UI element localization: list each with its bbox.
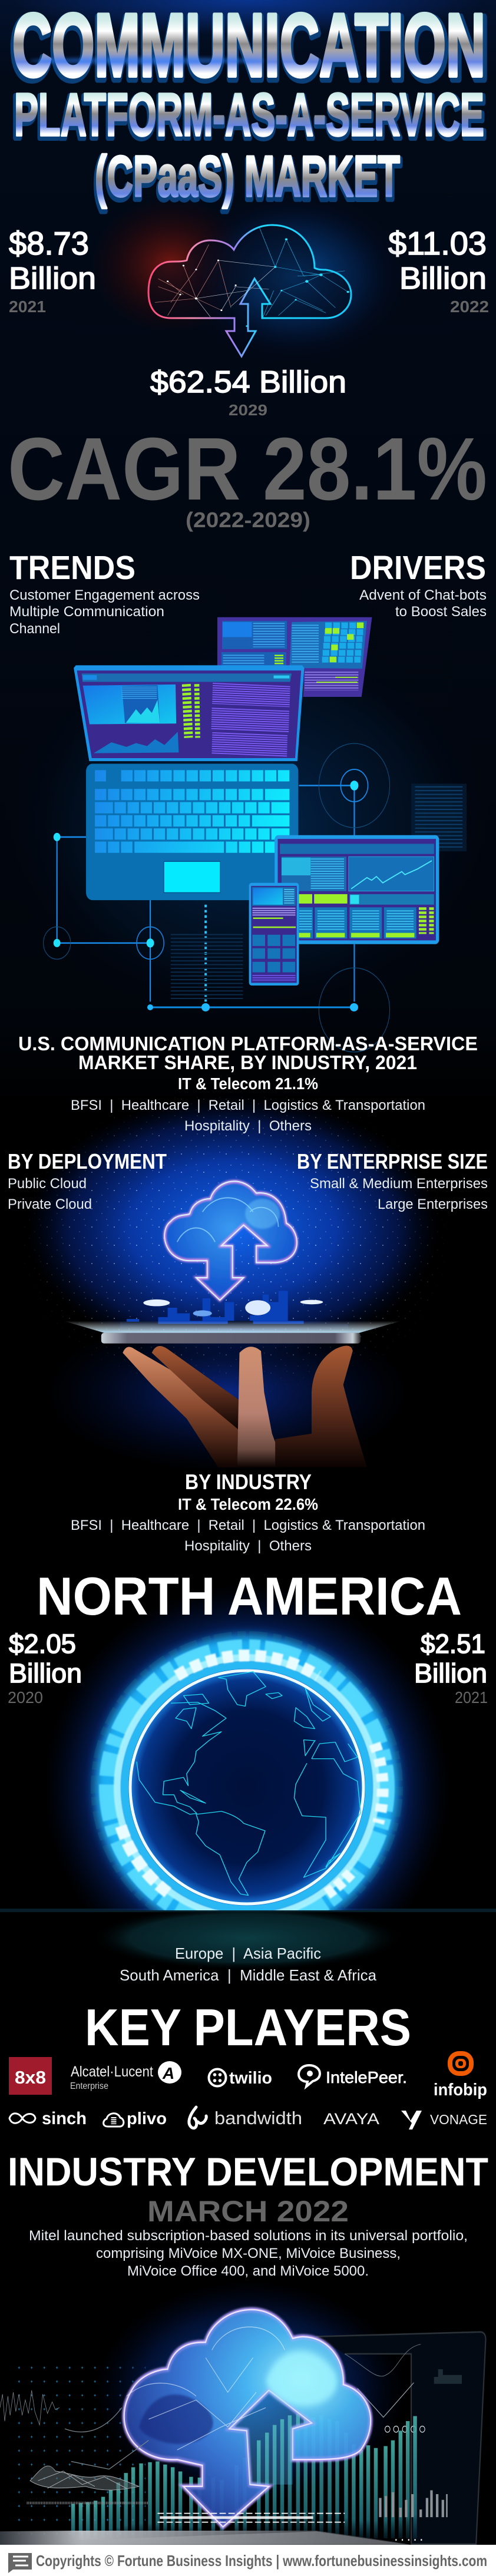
- by enterprise size: Small & Medium Enterprises: [310, 1176, 488, 1192]
- faint documents: [207, 783, 467, 1001]
- by deployment: Public Cloud: [8, 1176, 87, 1192]
- logo: Alcatel-Lucent Enterprise: A: [162, 2064, 174, 2082]
- circuit lines: [44, 743, 390, 1052]
- stat: 2021: $8.73: [9, 225, 89, 262]
- logo: 8x8: [9, 2057, 52, 2095]
- stat: 2020: $2.05: [9, 1629, 76, 1659]
- by enterprise size: [297, 1149, 488, 1212]
- ruler line: [27, 2501, 148, 2505]
- big cloud: [124, 2310, 371, 2527]
- by industry: IT & Telecom 22.6%: [178, 1495, 318, 1513]
- stat: 2029: 2029: [229, 401, 267, 419]
- glow behind laptop: [0, 624, 495, 1025]
- light beam: [63, 1321, 402, 1333]
- mesh wave: [30, 2466, 139, 2490]
- drivers: Advent of Chat-bots: [359, 587, 487, 603]
- by deployment: [8, 1149, 167, 1212]
- circuit base line: [147, 1003, 358, 1011]
- logos row 1: [9, 2051, 487, 2099]
- by industry: BFSI | Healthcare | Retail | Logistics & Transportation: [71, 1517, 425, 1533]
- curve: [65, 2408, 148, 2469]
- laptop keyboard: [86, 764, 298, 900]
- top blue glow: [12, 0, 484, 35]
- logos row 2: [9, 2107, 487, 2129]
- stat: 2020: [8, 1629, 82, 1707]
- continents: [137, 1672, 361, 1896]
- stat: 2022: [388, 225, 489, 316]
- by deployment: Private Cloud: [8, 1196, 92, 1212]
- trends: Channel: [9, 621, 60, 637]
- city skyline: [120, 1291, 348, 1328]
- stat: 2021 region: 2021: [455, 1688, 488, 1707]
- development text: MiVoice Office 400, and MiVoice 5000.: [127, 2263, 369, 2279]
- development text: comprising MiVoice MX-ONE, MiVoice Business,: [96, 2246, 401, 2261]
- stat: 2021: Billion: [9, 262, 96, 296]
- glow: [95, 2281, 405, 2504]
- stat: 2022: 2022: [450, 297, 489, 316]
- title flare: [29, 57, 265, 64]
- other regions: Europe | Asia Pacific: [175, 1945, 321, 1962]
- trends: Multiple Communication: [9, 604, 164, 620]
- illustration: devices: [44, 617, 467, 1052]
- stat: 2021: 2021: [9, 297, 46, 316]
- logo: plivo: plivo: [127, 2109, 167, 2128]
- logo: 8x8: 8x8: [15, 2067, 46, 2088]
- footer: [0, 2545, 496, 2576]
- stat: 2029: [150, 365, 346, 419]
- U.S. market share heading: [18, 1033, 478, 1134]
- logo: infobip: [434, 2051, 487, 2099]
- logo: Vonage: VONAGE: [430, 2112, 487, 2127]
- stat: 2022: $11.03: [388, 225, 487, 262]
- stat: 2020: 2020: [8, 1688, 43, 1707]
- back screen: [217, 617, 372, 697]
- region heading: NORTH AMERICA: [37, 1567, 462, 1626]
- stat: 2021: [9, 225, 96, 316]
- by industry: Hospitality | Others: [184, 1538, 312, 1554]
- phone: [249, 883, 299, 986]
- laptop surface: [0, 2531, 411, 2545]
- logo: sinch: sinch: [42, 2109, 87, 2128]
- logo: bandwidth: bandwidth: [214, 2108, 302, 2128]
- U.S. market share heading: BFSI | Healthcare | Retail | Logistics & Transportation: [71, 1097, 425, 1113]
- logo: Alcatel-Lucent Enterprise: Enterprise: [70, 2081, 108, 2091]
- dashed lines: [157, 2514, 345, 2522]
- glow and rings clipped to the floor line: [52, 1592, 442, 1910]
- stat: 2020: Billion: [9, 1658, 82, 1688]
- logo: Alcatel-Lucent Enterprise: Alcatel·Lucent: [71, 2064, 153, 2080]
- key players heading: KEY PLAYERS: [85, 1998, 411, 2056]
- CAGR: (2022-2029): [186, 508, 310, 532]
- network mesh: [155, 227, 349, 327]
- logo: IntelePeer: [299, 2065, 407, 2086]
- logo: twilio: twilio: [229, 2069, 272, 2088]
- other regions: South America | Middle East & Africa: [120, 1966, 377, 1984]
- by industry: BY INDUSTRY: [185, 1470, 312, 1494]
- hand: [123, 1345, 367, 1467]
- stat: 2021 region: $2.51: [421, 1629, 485, 1659]
- logo: plivo: [104, 2109, 167, 2128]
- waveform: [0, 2390, 59, 2425]
- other regions: [120, 1945, 377, 1984]
- icon: network cloud with up and down arrows: [91, 191, 406, 362]
- illustration: data cloud with charts: [0, 2281, 486, 2545]
- logo: Vonage: [401, 2111, 487, 2129]
- stat: 2022: Billion: [399, 262, 487, 296]
- bars: [71, 2413, 417, 2538]
- trends: TRENDS: [9, 549, 135, 587]
- drivers: to Boost Sales: [395, 604, 487, 620]
- logo: sinch: [9, 2109, 87, 2128]
- stat: 2029: $62.54 Billion: [150, 365, 346, 399]
- U.S. market share heading: IT & Telecom 21.1%: [178, 1074, 318, 1093]
- small grey bars: [379, 2490, 448, 2517]
- U.S. market share heading: U.S. COMMUNICATION PLATFORM-AS-A-SERVICE: [18, 1033, 478, 1054]
- stat: 2021 region: [414, 1629, 488, 1707]
- logo: IntelePeer: IntelePeer.: [326, 2068, 407, 2086]
- drivers: [350, 549, 487, 620]
- U.S. market share heading: Hospitality | Others: [184, 1118, 312, 1134]
- logo: infobip: infobip: [434, 2081, 487, 2099]
- tablet: [275, 835, 439, 944]
- U.S. market share heading: MARKET SHARE, BY INDUSTRY, 2021: [78, 1051, 417, 1073]
- drivers: DRIVERS: [350, 549, 486, 587]
- logo: Avaya: AVAYA: [323, 2110, 379, 2128]
- laptop outline: [316, 2332, 486, 2544]
- logo: Alcatel-Lucent Enterprise: [70, 2061, 181, 2091]
- by enterprise size: Large Enterprises: [378, 1196, 488, 1212]
- by industry: [71, 1470, 425, 1554]
- development text: [29, 2228, 468, 2279]
- phone: [101, 1333, 361, 1344]
- logo: twilio: [209, 2069, 272, 2088]
- trends: [9, 549, 200, 637]
- by deployment: BY DEPLOYMENT: [8, 1149, 167, 1173]
- cloud hologram: [164, 1181, 297, 1300]
- logo: [8, 2553, 32, 2573]
- title: [11, 0, 488, 211]
- illustration: hand holding phone with cloud hologram: [18, 1090, 448, 1473]
- stat: 2021 region: Billion: [414, 1658, 487, 1688]
- trends: Customer Engagement across: [9, 587, 200, 603]
- date: MARCH 2022: [147, 2195, 349, 2228]
- development text: Mitel launched subscription-based solutions in its universal portfolio,: [29, 2228, 468, 2244]
- illustration: glowing globe: [0, 1584, 496, 1990]
- laptop screen: [74, 665, 305, 761]
- dotted grid: [12, 2365, 146, 2538]
